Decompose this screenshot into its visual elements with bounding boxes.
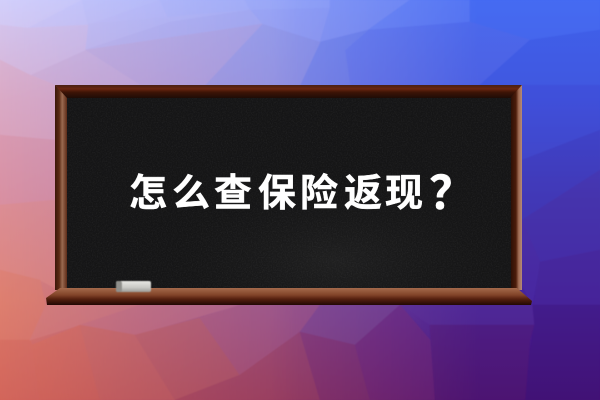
frame: right rail [511, 85, 522, 290]
board surface [66, 95, 512, 290]
frame: left rail [55, 85, 67, 290]
title: ？ [429, 167, 475, 219]
title: 怎么查保险返现 [129, 173, 423, 215]
chalk stick [116, 281, 151, 292]
frame: top rail [55, 85, 522, 98]
chalkboard [46, 85, 532, 305]
frame: bottom ledge [46, 288, 532, 305]
